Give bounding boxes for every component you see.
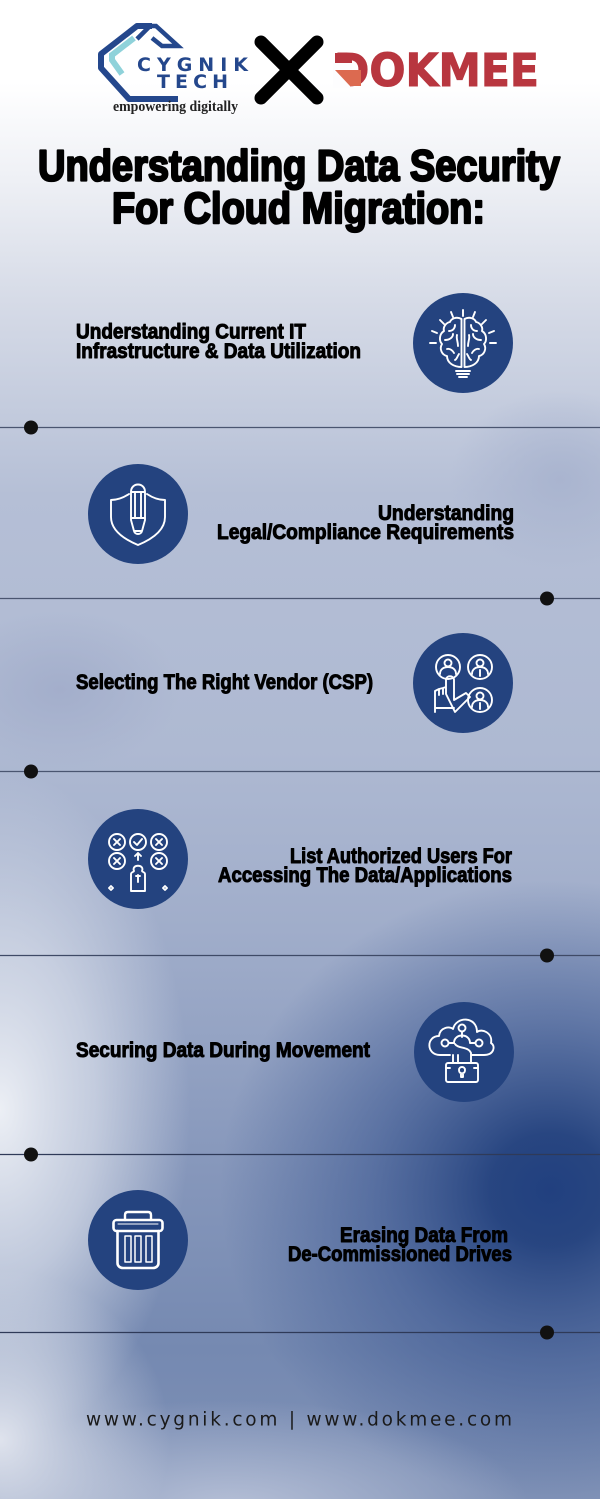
item 3 heading: Selecting The Right Vendor (CSP) [76,671,373,694]
title [38,142,560,233]
logo: Cygnik Tech: TECH [157,71,228,93]
item 1 heading: Understanding Current IT [76,320,306,344]
item 2 heading [217,502,514,544]
item 6 heading: De-Commissioned Drives [288,1243,512,1266]
footer website links: www.cygnik.com | www.dokmee.com [86,1410,512,1430]
divider 2 with dot [0,592,600,606]
icon: hand selecting a secured user [413,633,513,733]
item 5 heading: Securing Data During Movement [76,1039,370,1062]
icon: shield with pencil [88,464,188,564]
item 6 heading: Erasing Data From [340,1224,508,1247]
item 1 heading: Infrastructure & Data Utilization [76,340,361,363]
icon: brain with light bulb [413,293,513,393]
logos row [101,26,539,115]
divider 1 with dot [0,420,600,434]
divider 4 with dot [0,948,600,962]
divider 6 with dot [0,1326,600,1340]
icon: authorized user access grid [88,809,188,909]
item 1 heading [76,320,361,363]
icon: X collaboration mark [261,42,317,98]
logo: Cygnik Tech: CYGNIK [137,54,249,76]
title: For Cloud Migration: [112,185,485,233]
divider 3 with dot [0,764,600,778]
item 2 heading: Understanding [378,502,514,525]
item 4 heading [218,845,512,887]
item 6 heading [288,1224,512,1266]
item 2 heading: Legal/Compliance Requirements [217,521,514,544]
logo: Cygnik Tech: empowering digitally [113,99,239,115]
logo: Cygnik Tech [101,26,249,115]
icon: trash bin [88,1190,188,1290]
item 4 heading: Accessing The Data/Applications [218,864,512,887]
logo: Dokmee: DOKMEE [334,44,539,97]
item 4 heading: List Authorized Users For [290,845,512,868]
icon: cloud with padlock [414,1002,514,1102]
divider 5 with dot [0,1148,600,1162]
